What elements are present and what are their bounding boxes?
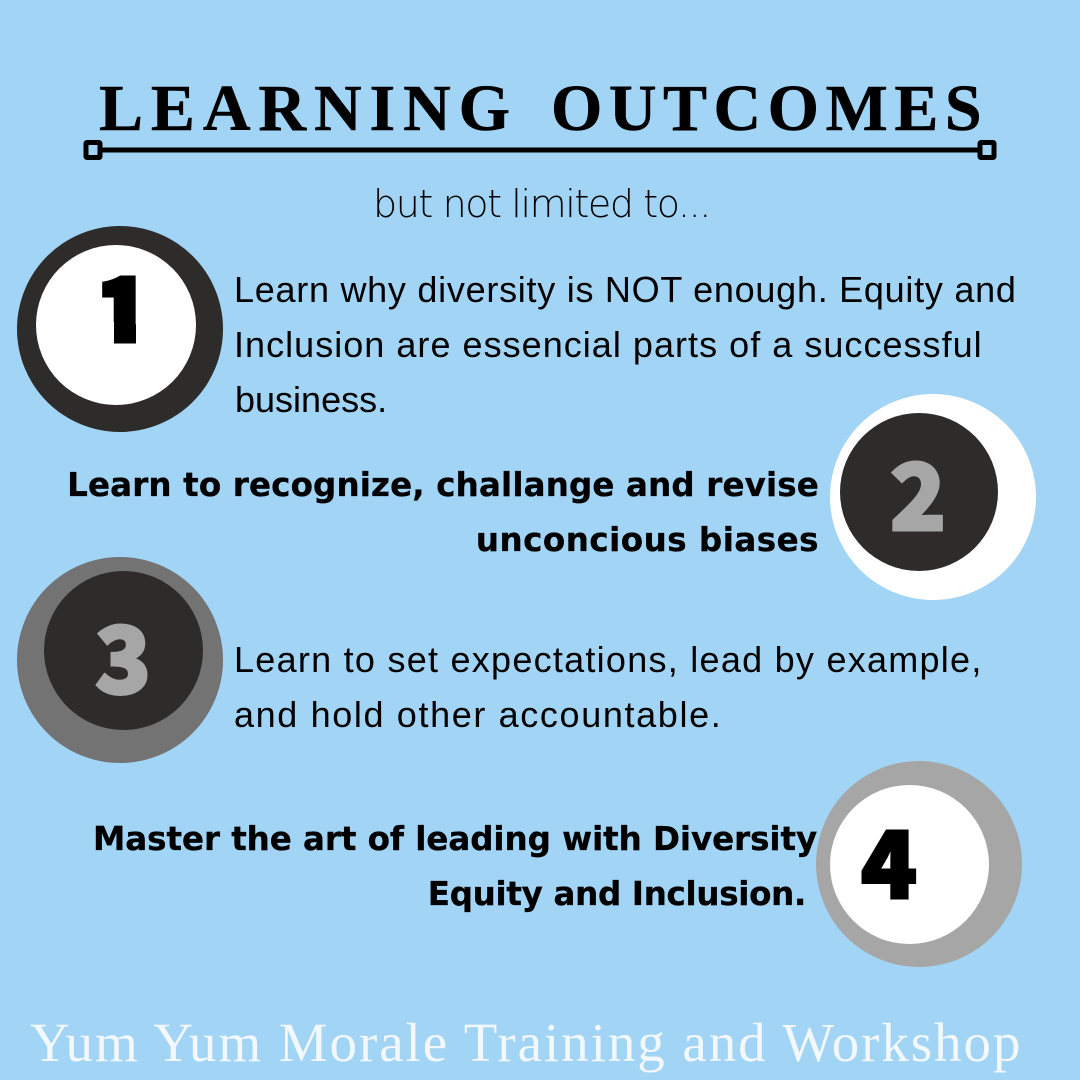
item 1 text: Learn why diversity is NOT enough. Equity and bbox=[234, 269, 1017, 310]
subtitle: but not limited to... bbox=[373, 182, 710, 226]
item 4 text: Master the art of leading with Diversity bbox=[93, 820, 817, 858]
item 3 text: Learn to set expectations, lead by example, bbox=[234, 639, 983, 680]
item 4 bbox=[93, 761, 1022, 967]
badge 1 bbox=[17, 226, 223, 432]
item 3 text bbox=[234, 639, 983, 735]
item 1 text: Inclusion are essencial parts of a successful bbox=[234, 324, 983, 365]
badge 3 bbox=[17, 557, 223, 763]
badge 2: 2 bbox=[890, 424, 946, 557]
title underline bbox=[84, 140, 996, 160]
item 2 bbox=[67, 394, 1036, 600]
item 4 text line 2: Equity and Inclusion. bbox=[428, 875, 806, 913]
item 2 text: Learn to recognize, challange and revise bbox=[67, 466, 819, 504]
item 1 text: business. bbox=[235, 379, 387, 420]
item 1 text bbox=[234, 269, 1017, 420]
title: LEARNING bbox=[99, 72, 518, 145]
item 2 text bbox=[67, 466, 819, 559]
item 3 bbox=[17, 557, 983, 763]
item 1 bbox=[17, 226, 1017, 432]
badge 4 bbox=[816, 761, 1022, 967]
badge 2 bbox=[830, 394, 1036, 600]
title: OUTCOMES bbox=[551, 72, 988, 145]
badge 1: 1 bbox=[97, 244, 149, 365]
badge 4: 4 bbox=[861, 792, 917, 925]
title bbox=[99, 72, 988, 145]
item 3 text: and hold other accountable. bbox=[234, 694, 722, 735]
footer: Yum Yum Morale Training and Workshop bbox=[30, 1012, 1022, 1073]
item 2 text: unconcious biases bbox=[476, 521, 819, 559]
badge 3: 3 bbox=[95, 587, 151, 720]
